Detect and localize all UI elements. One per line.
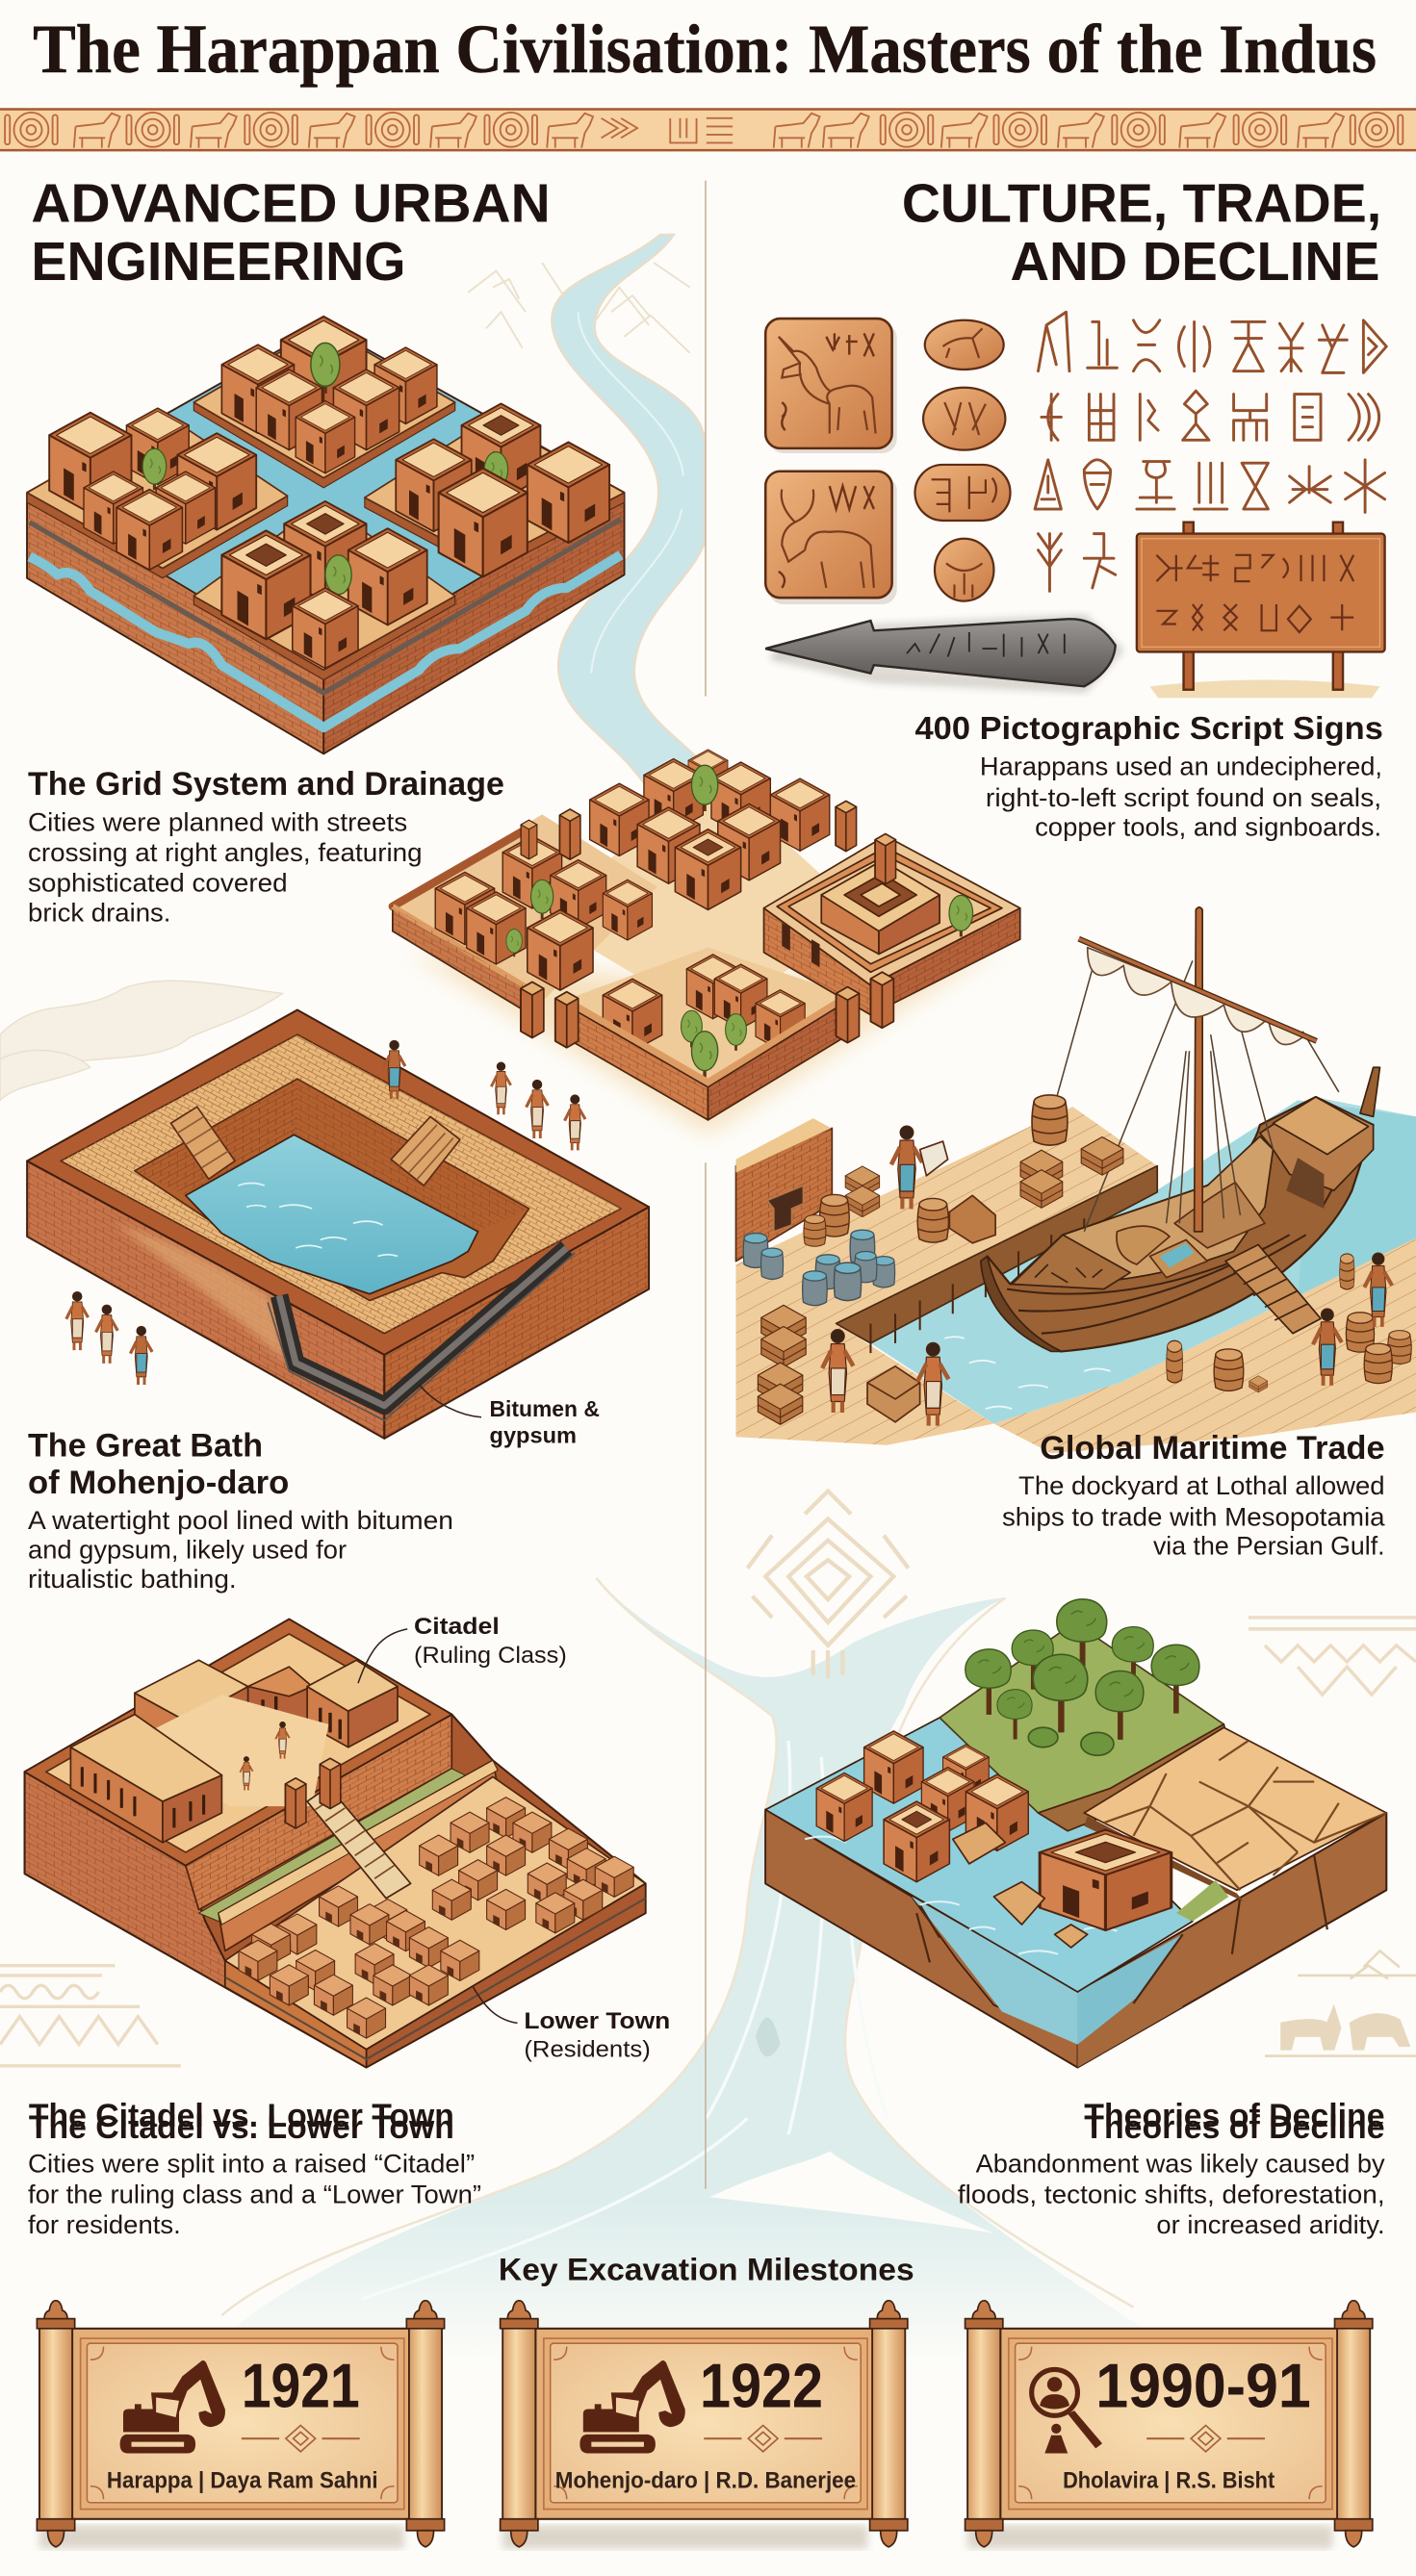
seal: unicorn	[765, 319, 897, 453]
text: citadel vs lower town: The Citadel vs. Lower Town	[29, 2098, 454, 2134]
text: theories of decline: Abandonment was likely caused by	[976, 2150, 1385, 2179]
icon: magnifying glass with person	[1032, 2369, 1102, 2454]
background: faint animals and zigzag right	[1265, 1951, 1416, 2056]
seals and script signs	[765, 312, 1386, 698]
text: script signs: copper tools, and signboards.	[1035, 813, 1381, 842]
center divider	[705, 181, 707, 2189]
text: citadel vs lower town: Cities were split into a raised “Citadel”	[28, 2150, 475, 2179]
citadel buildings	[135, 1660, 398, 1757]
text: theories of decline	[958, 2098, 1385, 2239]
callout: citadel: (Ruling Class)	[414, 1643, 567, 1669]
text: global maritime trade: Global Maritime Trade	[1040, 1430, 1385, 1467]
text: citadel vs lower town: for residents.	[28, 2210, 181, 2239]
illustration: citadel and lower town	[25, 1620, 646, 2067]
callout: citadel	[358, 1614, 567, 1683]
milestone scroll: 1990-91: Dholavira | R.S. Bisht	[1063, 2467, 1274, 2493]
heading: culture, trade and decline: CULTURE, TRADE,	[902, 172, 1381, 233]
text: script signs: Harappans used an undeciphered,	[980, 752, 1382, 780]
callout: lower town	[473, 1987, 670, 2062]
text: script signs: 400 Pictographic Script Signs	[915, 711, 1383, 747]
text: theories of decline: floods, tectonic shifts, deforestation,	[958, 2180, 1385, 2208]
heading: culture, trade and decline: AND DECLINE	[1010, 231, 1379, 292]
illustration: great bath	[27, 1010, 649, 1439]
milestone scroll: 1921	[37, 2301, 445, 2549]
decorative frieze band	[0, 109, 1416, 151]
background: faint hills left	[0, 981, 283, 1100]
text: the grid system and drainage: Cities were planned with streets	[28, 807, 407, 836]
milestone scroll: 1922: Mohenjo-daro | R.D. Banerjee	[555, 2467, 856, 2493]
text: global maritime trade: The dockyard at Lothal allowed	[1018, 1471, 1385, 1500]
text: the grid system and drainage: brick drains.	[28, 898, 170, 927]
text: the great bath: The Great Bath	[28, 1428, 263, 1465]
text: theories of decline: Theories of Decline	[1084, 2109, 1385, 2146]
text: the grid system and drainage: crossing at right angles, featuring	[28, 838, 423, 867]
background: tribal diamond motif	[747, 1492, 909, 1678]
callout: lower town: Lower Town	[524, 2008, 670, 2034]
dock cargo and figures	[743, 1095, 1411, 1426]
background: upper river	[552, 235, 723, 804]
signboard	[1137, 523, 1385, 698]
copper tool	[765, 618, 1120, 690]
text: script signs	[915, 711, 1383, 842]
text: the grid system and drainage	[28, 766, 504, 927]
heading: culture, trade and decline	[902, 172, 1381, 292]
text: citadel vs lower town: The Citadel vs. Lower Town	[29, 2109, 454, 2146]
illustration: maritime trade at lothal	[736, 907, 1416, 1453]
background: lower river delta	[197, 1578, 1199, 2364]
illustration: theories of decline	[765, 1599, 1386, 2067]
text: the great bath	[28, 1428, 453, 1594]
pictographic script signs	[1035, 312, 1386, 591]
small round seals	[915, 320, 1010, 601]
callout: bitumen and gypsum: Bitumen &	[490, 1396, 600, 1421]
callout: citadel: Citadel	[414, 1614, 500, 1640]
text: citadel vs lower town	[28, 2098, 481, 2239]
callout: bitumen and gypsum	[419, 1385, 600, 1447]
text: global maritime trade: via the Persian Gulf.	[1153, 1531, 1385, 1560]
text: the grid system and drainage: sophisticated covered	[28, 869, 288, 898]
background: faint mountains top	[468, 263, 690, 353]
callout: lower town: (Residents)	[524, 2036, 651, 2062]
milestone scroll: 1922: 1922	[700, 2351, 823, 2421]
text: global maritime trade: ships to trade with Mesopotamia	[1002, 1502, 1385, 1531]
callout: bitumen and gypsum: gypsum	[490, 1422, 577, 1447]
text: global maritime trade	[1002, 1430, 1385, 1560]
text: the great bath: and gypsum, likely used for	[28, 1535, 347, 1564]
icon: excavator 2	[579, 2360, 685, 2454]
seal: bull	[765, 472, 897, 604]
heading: key excavation milestones: Key Excavation Milestones	[499, 2252, 914, 2286]
mast and rigging	[1051, 907, 1339, 1232]
text: theories of decline: Theories of Decline	[1084, 2098, 1385, 2134]
milestone scroll: 1990-91	[965, 2301, 1373, 2549]
milestone scroll: 1921: 1921	[242, 2351, 360, 2421]
text: the great bath: A watertight pool lined with bitumen	[28, 1506, 453, 1535]
text: the grid system and drainage: The Grid System and Drainage	[28, 766, 504, 803]
text: citadel vs lower town: for the ruling class and a “Lower Town”	[28, 2180, 481, 2208]
icon: excavator	[120, 2360, 225, 2454]
background: zigzag patterns	[0, 1618, 1416, 2066]
illustration: walled city	[393, 750, 1020, 1133]
ship	[981, 1067, 1379, 1351]
text: the great bath: of Mohenjo-daro	[28, 1465, 289, 1501]
illustration: grid system and drainage	[27, 317, 624, 753]
heading: advanced urban engineering: ENGINEERING	[31, 231, 406, 292]
milestone scroll: 1990-91: 1990-91	[1095, 2351, 1311, 2421]
text: script signs: right-to-left script found on seals,	[986, 783, 1381, 812]
milestone scroll: 1922	[501, 2301, 908, 2549]
text: theories of decline: or increased aridity.	[1156, 2210, 1385, 2239]
lower town houses	[239, 1798, 633, 2038]
text: the great bath: ritualistic bathing.	[28, 1565, 237, 1594]
milestone scroll: 1921: Harappa | Daya Ram Sahni	[107, 2467, 377, 2493]
heading: advanced urban engineering: ADVANCED URBAN	[31, 172, 551, 233]
heading: advanced urban engineering	[31, 172, 551, 292]
